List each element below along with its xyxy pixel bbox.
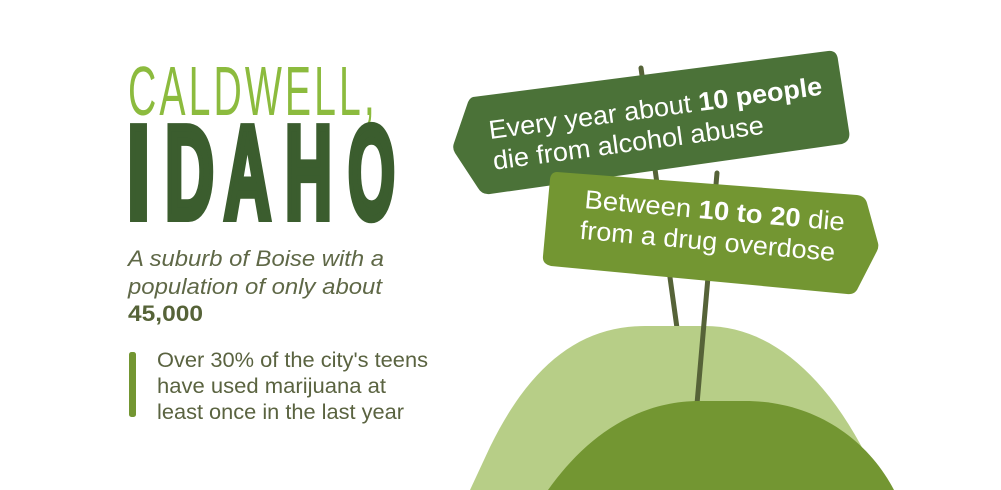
infographic canvas: O	[348, 99, 395, 246]
description: suburb and population: A suburb of Boise with a	[126, 246, 384, 271]
sign post: right	[697, 173, 717, 404]
sign text: drug overdose: from a drug overdose	[579, 215, 836, 267]
title: Idaho: A	[224, 99, 271, 246]
sign text: alcohol: Every year about 10 people	[487, 71, 824, 145]
hill: dark	[548, 401, 894, 490]
title: Idaho: I	[127, 99, 150, 246]
title: Caldwell: CALDWELL,	[128, 53, 378, 131]
sign text: alcohol: die from alcohol abuse	[491, 110, 765, 176]
description: suburb and population: 45,000	[128, 301, 203, 326]
title: Idaho	[127, 99, 395, 246]
sign text: alcohol	[487, 71, 828, 176]
description: suburb and population: population of only about	[127, 274, 383, 299]
text block: teen marijuana use: least once in the last year	[157, 401, 404, 424]
text block: teen marijuana use: Over 30% of the city's teens	[157, 349, 428, 372]
sign text: drug overdose	[579, 184, 846, 268]
hill: light	[470, 326, 866, 490]
text block: teen marijuana use: have used marijuana at	[157, 375, 386, 398]
description: suburb and population	[126, 246, 384, 326]
title: Idaho: D	[165, 99, 214, 246]
title: Idaho: H	[285, 99, 332, 246]
sign: alcohol	[453, 51, 849, 194]
sign post: left	[641, 68, 677, 328]
accent bar	[129, 352, 136, 417]
sign text: drug overdose: Between 10 to 20 die	[583, 184, 846, 237]
text block: teen marijuana use	[157, 349, 428, 424]
sign: drug overdose	[543, 172, 878, 294]
